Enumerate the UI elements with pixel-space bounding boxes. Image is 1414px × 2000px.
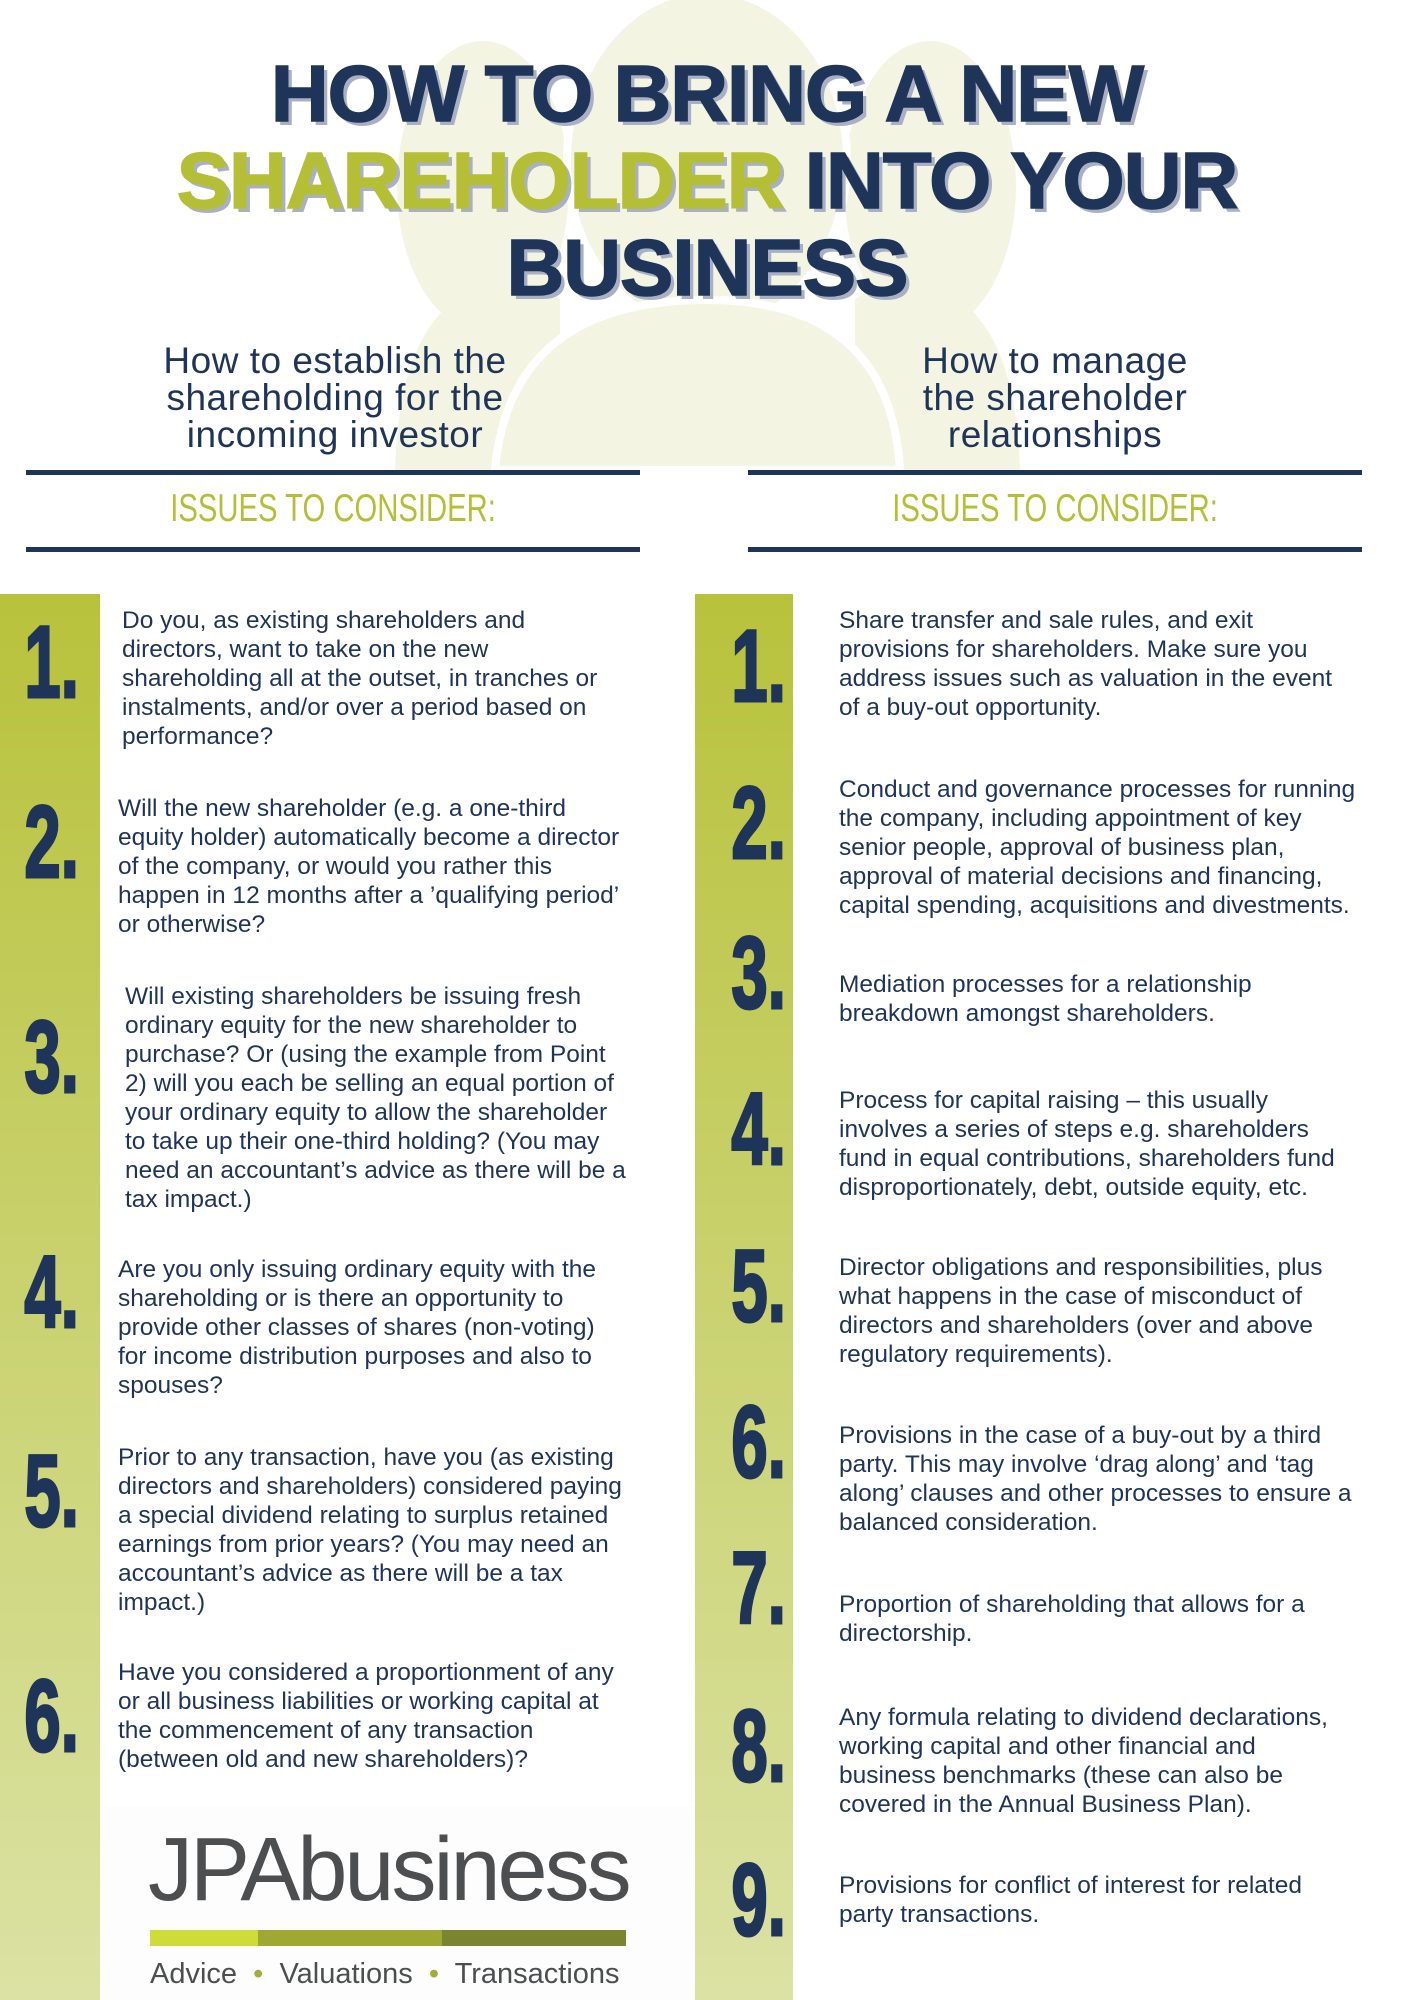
- left item 4: [24, 1235, 596, 1399]
- left item 6: or all business liabilities or working capital at: [118, 1688, 599, 1715]
- logo: JPAbusiness: JPAbusiness: [148, 1820, 629, 1920]
- left item 6: 6.: [24, 1659, 79, 1773]
- left item 3: 3.: [24, 1000, 79, 1114]
- subheading right: the shareholder: [923, 377, 1187, 418]
- left item 2: or otherwise?: [118, 911, 265, 938]
- right item 5: Director obligations and responsibilities, plus: [839, 1254, 1322, 1281]
- right item 5: [731, 1229, 1322, 1368]
- left item 1: 1.: [24, 605, 79, 719]
- left item 3: to take up their one-third holding? (You may: [125, 1128, 599, 1155]
- left item 5: accountant’s advice as there will be a tax: [118, 1560, 563, 1587]
- left list: impact.): [118, 1589, 205, 1616]
- right item 6: balanced consideration.: [839, 1509, 1098, 1536]
- subheading right: How to manage: [922, 340, 1188, 381]
- left item 1: instalments, and/or over a period based on: [122, 694, 586, 721]
- right item 7: [731, 1531, 1305, 1647]
- right item 6: [731, 1385, 1352, 1536]
- right item 3: breakdown amongst shareholders.: [839, 1000, 1215, 1027]
- left item 2: [24, 785, 619, 938]
- logo: JPAbusiness: Advice • Valuations • Transactions: [150, 1958, 620, 1990]
- subheading right: [922, 340, 1188, 455]
- right item 5: directors and shareholders (over and above: [839, 1312, 1313, 1339]
- left item 2: happen in 12 months after a ’qualifying period’: [118, 882, 619, 909]
- right item 9: 9.: [731, 1843, 786, 1957]
- left item 4: 4.: [24, 1235, 79, 1349]
- left item 3: ordinary equity for the new shareholder to: [125, 1012, 577, 1039]
- right item 3: [731, 916, 1252, 1030]
- right item 1: Share transfer and sale rules, and exit: [839, 607, 1253, 634]
- right list: capital spending, acquisitions and divestments.: [839, 892, 1350, 919]
- issues heading right: ISSUES TO CONSIDER:: [892, 487, 1218, 530]
- right item 4: fund in equal contributions, shareholders fund: [839, 1145, 1335, 1172]
- right item 1: 1.: [731, 609, 786, 723]
- right item 2: [731, 766, 1355, 919]
- left item 5: a special dividend relating to surplus retained: [118, 1502, 608, 1529]
- left item 3: 2) will you each be selling an equal portion of: [125, 1070, 614, 1097]
- subheading right: relationships: [948, 414, 1162, 455]
- right item 5: what happens in the case of misconduct of: [839, 1283, 1302, 1310]
- right item 7: 7.: [731, 1531, 786, 1645]
- left item 6: the commencement of any transaction: [118, 1717, 533, 1744]
- right item 4: Process for capital raising – this usually: [839, 1087, 1268, 1114]
- left item 2: 2.: [24, 785, 79, 899]
- right item 2: the company, including appointment of key: [839, 805, 1302, 832]
- title: HOW TO BRING A NEW: [271, 49, 1143, 138]
- left item 5: directors and shareholders) considered paying: [118, 1473, 622, 1500]
- subheading left: incoming investor: [187, 414, 483, 455]
- right item 6: along’ clauses and other processes to ensure a: [839, 1480, 1352, 1507]
- issues heading left: ISSUES TO CONSIDER:: [170, 487, 496, 530]
- left item 4: provide other classes of shares (non-voting): [118, 1314, 595, 1341]
- left item 6: (between old and new shareholders)?: [118, 1746, 528, 1773]
- left item 3: [24, 983, 626, 1213]
- left item 3: tax impact.): [125, 1186, 252, 1213]
- right item 2: Conduct and governance processes for running: [839, 776, 1355, 803]
- right item 6: party. This may involve ‘drag along’ and ‘tag: [839, 1451, 1314, 1478]
- title: BUSINESS: [506, 223, 907, 312]
- left item 2: of the company, or would you rather this: [118, 853, 552, 880]
- right item 8: working capital and other financial and: [839, 1733, 1256, 1760]
- right item 8: covered in the Annual Business Plan).: [839, 1791, 1252, 1818]
- left item 1: shareholding all at the outset, in tranches or: [122, 665, 597, 692]
- right item 9: [731, 1843, 1302, 1957]
- right item 4: disproportionately, debt, outside equity, etc.: [839, 1174, 1308, 1201]
- left item 2: equity holder) automatically become a director: [118, 824, 619, 851]
- right green bar: [695, 594, 793, 2000]
- right item 8: 8.: [731, 1689, 786, 1803]
- left item 3: need an accountant’s advice as there will be a: [125, 1157, 626, 1184]
- right item 5: regulatory requirements).: [839, 1341, 1113, 1368]
- left item 5: [24, 1434, 622, 1616]
- background people silhouettes: [395, 0, 1020, 470]
- left item 6: Have you considered a proportionment of any: [118, 1659, 614, 1686]
- title: SHAREHOLDER INTO YOUR: [177, 136, 1237, 225]
- left item 2: Will the new shareholder (e.g. a one-third: [118, 795, 566, 822]
- right item 7: Proportion of shareholding that allows for a: [839, 1591, 1305, 1618]
- left item 1: [24, 605, 597, 750]
- left item 3: your ordinary equity to allow the shareholder: [125, 1099, 607, 1126]
- left item 1: Do you, as existing shareholders and: [122, 607, 525, 634]
- right item 1: provisions for shareholders. Make sure you: [839, 636, 1307, 663]
- right item 8: [731, 1689, 1328, 1818]
- left item 5: earnings from prior years? (You may need an: [118, 1531, 609, 1558]
- left item 5: 5.: [24, 1434, 79, 1548]
- left item 3: purchase? Or (using the example from Point: [125, 1041, 606, 1068]
- left green bar: [0, 594, 100, 2000]
- left item 4: for income distribution purposes and also to: [118, 1343, 592, 1370]
- right item 4: [731, 1072, 1335, 1201]
- subheading left: [163, 340, 507, 455]
- subheading left: How to establish the: [163, 340, 507, 381]
- right item 3: 3.: [731, 916, 786, 1030]
- right item 2: approval of material decisions and financing,: [839, 863, 1322, 890]
- left item 1: directors, want to take on the new: [122, 636, 488, 663]
- right item 1: of a buy-out opportunity.: [839, 694, 1101, 721]
- right item 4: involves a series of steps e.g. shareholders: [839, 1116, 1309, 1143]
- right item 7: directorship.: [839, 1620, 972, 1647]
- right item 5: 5.: [731, 1229, 786, 1343]
- right item 3: Mediation processes for a relationship: [839, 971, 1252, 998]
- right item 9: party transactions.: [839, 1901, 1039, 1928]
- right item 6: 6.: [731, 1385, 786, 1499]
- right item 6: Provisions in the case of a buy-out by a third: [839, 1422, 1321, 1449]
- right item 2: 2.: [731, 766, 786, 880]
- right list: [731, 607, 1355, 1957]
- right item 4: 4.: [731, 1072, 786, 1186]
- left item 1: performance?: [122, 723, 273, 750]
- logo: JPAbusiness: [100, 1806, 695, 2000]
- left item 4: shareholding or is there an opportunity to: [118, 1285, 563, 1312]
- left list: [24, 605, 626, 1773]
- left item 3: Will existing shareholders be issuing fresh: [125, 983, 581, 1010]
- subheading left: shareholding for the: [166, 377, 504, 418]
- title: [177, 49, 1240, 312]
- left item 4: spouses?: [118, 1372, 223, 1399]
- right item 1: address issues such as valuation in the event: [839, 665, 1332, 692]
- right item 8: Any formula relating to dividend declarations,: [839, 1704, 1328, 1731]
- left item 6: [24, 1659, 614, 1773]
- left item 4: Are you only issuing ordinary equity with the: [118, 1256, 596, 1283]
- right item 8: business benchmarks (these can also be: [839, 1762, 1283, 1789]
- left item 5: Prior to any transaction, have you (as existing: [118, 1444, 614, 1471]
- right item 2: senior people, approval of business plan,: [839, 834, 1284, 861]
- right item 1: [731, 607, 1332, 723]
- right item 9: Provisions for conflict of interest for related: [839, 1872, 1302, 1899]
